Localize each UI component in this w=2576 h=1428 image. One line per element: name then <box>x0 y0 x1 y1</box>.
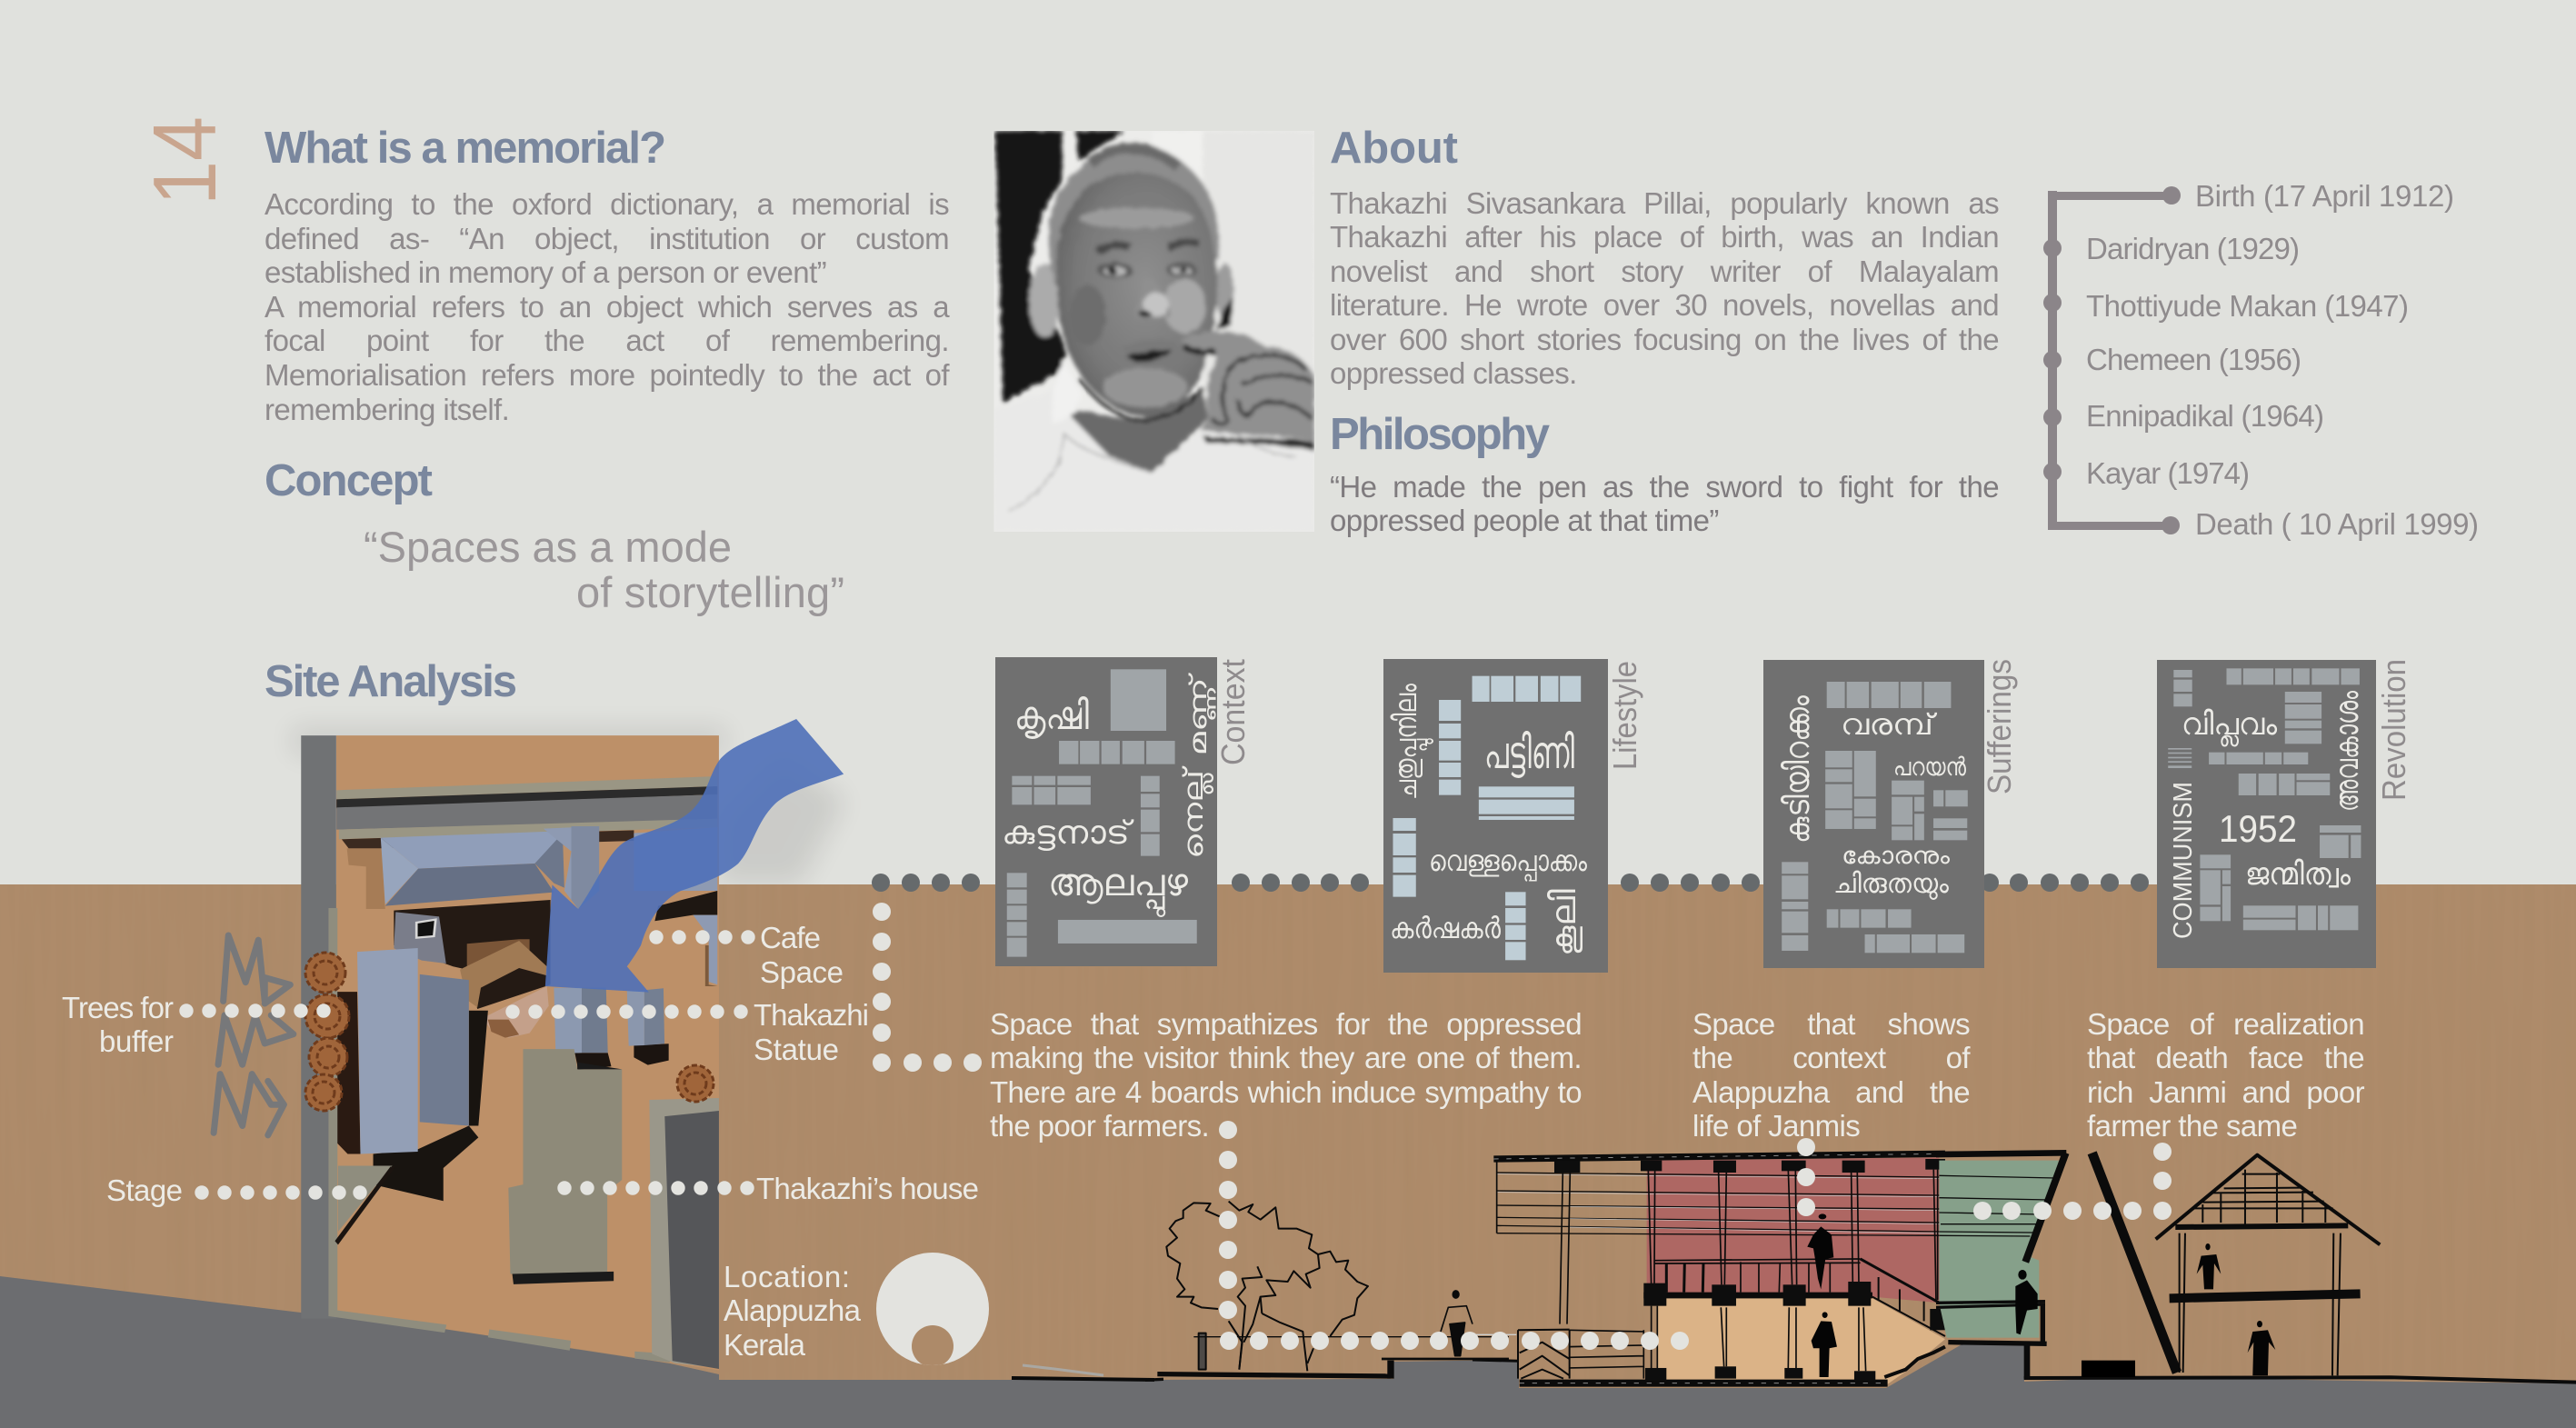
walking figure <box>1441 1291 1473 1356</box>
board: Context <box>995 657 1217 966</box>
board words: മണ്ണ് <box>1184 672 1215 756</box>
label: Lifestyle: Lifestyle <box>1606 661 1643 770</box>
text: about: oppressed classes. <box>1330 356 1577 390</box>
board words: ജന്മിത്വം <box>2245 857 2351 892</box>
text: sympathy space: There are 4 boards which induce sympathy to <box>990 1075 1582 1109</box>
text: context space: Alappuzha and the <box>1692 1075 1970 1109</box>
purlins <box>1497 1173 1939 1235</box>
stairs <box>1861 1259 1942 1304</box>
tree buffer scribbles <box>214 935 294 1135</box>
dotted path: dark row along horizon <box>872 874 2149 892</box>
text: about <box>1330 186 1999 390</box>
brows, eyes <box>1097 242 1198 252</box>
text: memorial definition: focal point for the act of remembering. <box>265 324 949 357</box>
headings <box>265 124 1550 706</box>
columns <box>1560 1170 1936 1371</box>
facial light <box>1079 208 1193 228</box>
head <box>1056 173 1217 417</box>
page number: 14 <box>135 116 235 205</box>
board words: ചതുപ്പുനിലം <box>1389 683 1433 800</box>
red upper storey <box>1647 1157 1941 1303</box>
board words: കുട്ടനാട് <box>1002 814 1134 851</box>
board words <box>1002 672 1215 917</box>
site labels: buffer <box>99 1024 174 1058</box>
board words: കർഷകർ <box>1390 912 1502 944</box>
heading: What is a memorial: What is a memorial? <box>265 124 666 173</box>
timeline labels: Ennipadikal (1964) <box>2086 399 2324 433</box>
board words: COMMUNISM <box>2169 782 2198 939</box>
text: realization space: farmer the same <box>2087 1109 2297 1143</box>
ground: grey base <box>0 1276 2576 1428</box>
label: Sufferings: Sufferings <box>1981 659 2018 794</box>
concrete slab <box>508 1049 622 1273</box>
board words: വിപ്ലവം <box>2182 707 2278 747</box>
mouth <box>1121 339 1180 368</box>
hut roof <box>2156 1155 2380 1244</box>
figures <box>2015 1243 2275 1375</box>
board words: 1952 <box>2219 807 2297 850</box>
site labels: Trees for <box>62 991 174 1024</box>
heading: Concept: Concept <box>265 456 433 505</box>
hand <box>1182 332 1314 443</box>
label: Context: Context <box>1214 659 1252 765</box>
board words: വെള്ളപ്പൊക്കം <box>1429 844 1587 881</box>
timeline labels: Chemeen (1956) <box>2086 343 2301 376</box>
text: about: over 600 short stories focusing on the lives of the <box>1330 323 1999 356</box>
icon: location marker <box>876 1253 989 1367</box>
text: philosophy quote: “He made the pen as the sword to fight for the <box>1330 470 1999 504</box>
model lower structures <box>328 908 719 1369</box>
tree models <box>305 953 714 1111</box>
board words: അവകാശം <box>2328 690 2365 812</box>
section: left ground line <box>1012 1365 1154 1380</box>
label: Revolution: Revolution <box>2375 659 2412 801</box>
blue river overlay <box>545 719 844 993</box>
section dots <box>1219 1121 2172 1350</box>
heading: About: About <box>1330 124 1458 173</box>
text: memorial definition: remembering itself. <box>265 393 509 426</box>
model upper structures <box>336 776 717 1070</box>
text: memorial definition: According to the oxford dictionary, a memorial is <box>265 187 949 221</box>
timeline labels: Kayar (1974) <box>2086 456 2250 490</box>
ground: brown band <box>0 884 2576 1393</box>
text: sympathy space: the poor farmers. <box>990 1109 1209 1143</box>
site labels: Stage <box>106 1173 183 1207</box>
board: Lifestyle <box>1383 659 1608 973</box>
model base board <box>301 735 719 1370</box>
board words: ചിരുതയും <box>1833 869 1949 900</box>
timeline line <box>2043 186 2181 534</box>
concept quote <box>364 523 844 616</box>
board words: പറയൻ <box>1893 753 1966 781</box>
text: memorial definition <box>265 187 950 426</box>
text: memorial definition: defined as- “An object, institution or custom <box>265 222 949 255</box>
timeline <box>2043 179 2479 541</box>
text: realization space: that death face the <box>2087 1041 2364 1074</box>
text: memorial definition: Memorialisation refers more pointedly to the act of <box>265 358 949 392</box>
section: building <box>1473 1153 1945 1386</box>
board words <box>1389 683 1587 956</box>
text: context space: the context of <box>1692 1041 1970 1074</box>
text: sympathy space: making the visitor think they are one of them. <box>990 1041 1582 1074</box>
board words: കൃഷി <box>1014 694 1089 739</box>
railing <box>1654 1259 1861 1263</box>
portrait photo <box>993 131 1314 532</box>
board words: കുടിയിറക്കം <box>1779 695 1817 844</box>
Thakazhi's house <box>649 1098 719 1369</box>
text: memorial definition: A memorial refers to an object which serves as a <box>265 290 949 324</box>
ears <box>1029 264 1061 337</box>
grey board stage panels <box>357 948 418 1154</box>
site leader dots <box>179 930 755 1200</box>
figures <box>1807 1213 1837 1377</box>
timeline labels: Birth (17 April 1912) <box>2195 179 2454 213</box>
site labels: Alappuzha <box>724 1293 862 1327</box>
timeline labels: Death ( 10 April 1999) <box>2195 507 2479 541</box>
site model <box>301 719 844 1370</box>
text: philosophy quote: oppressed people at that time” <box>1330 504 1719 537</box>
site labels: Cafe <box>760 921 821 954</box>
site labels: Space <box>760 955 844 989</box>
concept quote: of storytelling” <box>576 568 844 616</box>
section: tree sketch and entry <box>1145 1202 1509 1380</box>
site labels: Thakazhi <box>754 998 869 1032</box>
site labels: Statue <box>754 1033 839 1066</box>
chevrons <box>1518 1330 1570 1379</box>
heading: Site Analysis: Site Analysis <box>265 657 517 706</box>
jaw <box>1079 379 1203 421</box>
text: realization space <box>2087 1007 2365 1143</box>
text: about: Thakazhi after his place of birth, was an Indian <box>1330 220 1999 254</box>
site labels: Thakazhi’s house <box>756 1172 979 1205</box>
board words: വരമ്പ് <box>1841 708 1938 741</box>
site labels: Location: <box>724 1260 850 1293</box>
text: about: Thakazhi Sivasankara Pillai, popularly known as <box>1330 186 1999 220</box>
main roof <box>381 826 599 909</box>
text: sympathy space: Space that sympathizes for the oppressed <box>990 1007 1582 1041</box>
text: realization space: Space of realization <box>2087 1007 2364 1041</box>
text: context space: Space that shows <box>1692 1007 1970 1041</box>
slabs <box>1493 1153 1945 1159</box>
text: about: literature. He wrote over 30 novels, novellas and <box>1330 288 1999 322</box>
tan lower storey <box>1657 1298 1945 1386</box>
heading: Philosophy: Philosophy <box>1330 410 1550 459</box>
text: about: novelist and short story writer of Malayalam <box>1330 255 1999 288</box>
text: memorial definition: established in memory of a person or event” <box>265 255 826 289</box>
timeline labels: Thottiyude Makan (1947) <box>2086 289 2409 323</box>
text: sympathy space <box>990 1007 1582 1143</box>
model shadow <box>293 727 845 884</box>
concept quote: “Spaces as a mode <box>364 523 732 571</box>
board words <box>2169 690 2365 939</box>
board words <box>1779 695 1966 900</box>
site labels: Kerala <box>724 1328 806 1362</box>
board words: കൂലി <box>1545 889 1583 956</box>
shirt <box>1001 391 1314 473</box>
board words: പട്ടിണി <box>1484 727 1574 778</box>
section: green wing, hut and figures <box>1936 1153 2576 1383</box>
neck <box>1073 391 1209 473</box>
text: philosophy quote <box>1330 470 1999 537</box>
board words: കോരനും <box>1842 842 1950 869</box>
board words: നെല്ല് <box>1179 765 1213 859</box>
capitals <box>1554 1159 1945 1380</box>
board: Revolution <box>2157 660 2376 968</box>
text: realization space: rich Janmi and poor <box>2087 1075 2364 1109</box>
site labels <box>62 921 979 1362</box>
board words: ആലപ്പുഴ <box>1048 861 1188 917</box>
hair <box>1049 145 1219 285</box>
dotted path: white connector to text <box>873 903 982 1072</box>
timeline labels <box>2086 179 2479 541</box>
timeline labels: Daridryan (1929) <box>2086 232 2300 265</box>
board: Sufferings <box>1763 660 1984 968</box>
text: context space: life of Janmis <box>1692 1109 1860 1143</box>
text: context space <box>1692 1007 1971 1143</box>
